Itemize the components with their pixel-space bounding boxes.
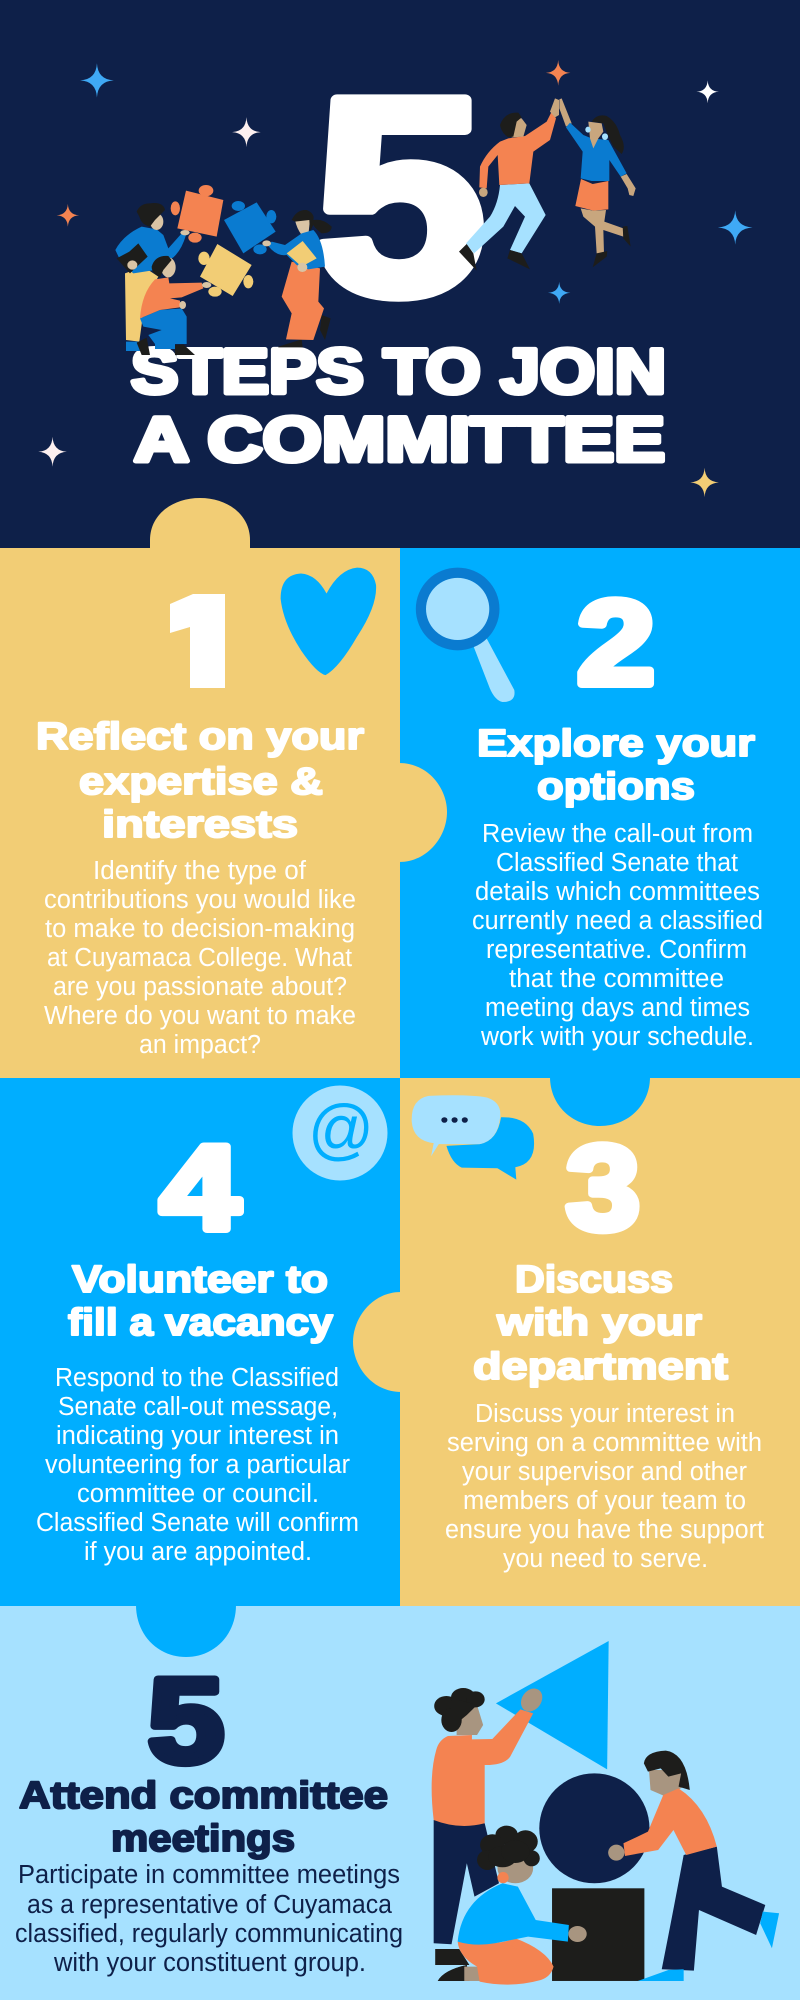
body step 5: as a representative of Cuyamaca	[27, 1891, 393, 1919]
panel: step 5 background	[0, 1606, 800, 2000]
number 3: 3	[566, 1121, 640, 1255]
body step 4: Respond to the Classified	[55, 1364, 339, 1392]
body step 1: Identify the type of	[93, 857, 307, 885]
shape: triangle	[496, 1641, 609, 1769]
body step 5: Participate in committee meetings	[18, 1861, 400, 1889]
body step 5	[15, 1861, 403, 1977]
body step 1: at Cuyamaca College. What	[47, 944, 352, 972]
illustration: team building shapes	[432, 1641, 779, 1985]
heading step 2	[477, 723, 755, 808]
heading step 5: Attend committee	[19, 1775, 388, 1817]
body step 2: meeting days and times	[485, 994, 750, 1022]
body step 1: are you passionate about?	[53, 973, 347, 1001]
icon: magnifying glass	[416, 568, 515, 702]
panel: step 3 background	[400, 1078, 800, 1607]
body step 2: Review the call-out from	[482, 820, 753, 848]
heading step 1: expertise &	[79, 761, 323, 803]
body step 2: representative. Confirm	[486, 936, 747, 964]
heading step 4: fill a vacancy	[68, 1302, 333, 1344]
step 4 content	[36, 1086, 388, 1566]
person: kneeling	[137, 256, 211, 355]
body step 4: indicating your interest in	[56, 1422, 339, 1450]
body step 2: details which committees	[475, 878, 760, 906]
body step 4: Senate call-out message,	[58, 1393, 338, 1421]
person: standing reaching up	[432, 1687, 545, 1981]
heading step 3: department	[473, 1346, 728, 1388]
puzzle tab: step 3 into step 4	[353, 1292, 401, 1392]
title: STEPS TO JOIN	[131, 337, 666, 407]
heading step 5: meetings	[111, 1818, 295, 1860]
body step 1: to make to decision-making	[45, 915, 355, 943]
person: pushing circle	[608, 1751, 779, 1981]
panel: step 1 background	[0, 548, 400, 1078]
person: high five man	[459, 98, 559, 271]
body step 1: contributions you would like	[44, 886, 356, 914]
heading step 1: interests	[102, 804, 298, 846]
heading step 3: Discuss	[515, 1259, 673, 1301]
puzzle piece: blue	[224, 201, 276, 254]
icon: at sign	[292, 1086, 388, 1180]
body step 3: ensure you have the support	[445, 1516, 764, 1544]
heading step 4: Volunteer to	[72, 1259, 328, 1301]
heading step 1	[36, 716, 364, 846]
number 4: 4	[160, 1121, 240, 1255]
title	[131, 337, 666, 475]
body step 3: serving on a committee with	[447, 1429, 762, 1457]
step 5 content	[15, 1641, 779, 1985]
heading step 1: Reflect on your	[36, 716, 364, 758]
body step 2: Classified Senate that	[496, 849, 738, 877]
heading step 3	[473, 1259, 728, 1388]
shape: circle	[539, 1773, 649, 1883]
number 5: 5	[148, 1654, 224, 1788]
heading step 4	[68, 1259, 333, 1344]
body step 3: Discuss your interest in	[475, 1400, 735, 1428]
body step 1	[44, 857, 356, 1059]
stars	[38, 60, 753, 497]
puzzle piece: yellow	[198, 244, 253, 297]
body step 5: classified, regularly communicating	[15, 1920, 403, 1948]
step 1 content	[36, 568, 376, 1059]
body step 4: if you are appointed.	[84, 1538, 312, 1566]
body step 1: Where do you want to make	[44, 1002, 356, 1030]
icon: at sign: @	[308, 1091, 374, 1167]
person: woman with folder	[262, 210, 332, 347]
number 2: 2	[577, 576, 655, 710]
icon: speech bubbles	[412, 1095, 534, 1180]
big number 5: 5	[314, 41, 486, 353]
body step 3: you need to serve.	[503, 1545, 708, 1573]
illustration: team solving puzzle	[115, 185, 332, 355]
body step 2	[472, 820, 763, 1051]
body step 4: committee or council.	[77, 1480, 319, 1508]
body step 3	[445, 1400, 764, 1573]
heading step 5	[19, 1775, 388, 1860]
title: A COMMITTEE	[134, 405, 665, 475]
puzzle tab: top of step 1	[150, 498, 250, 549]
step 3 content	[412, 1095, 764, 1573]
icon: heart	[281, 568, 376, 675]
body step 3: members of your team to	[463, 1487, 746, 1515]
person: standing with folder	[115, 203, 190, 351]
body step 4	[36, 1364, 359, 1566]
illustration: high five	[459, 98, 636, 271]
shape: square	[552, 1888, 644, 1981]
step 2 content	[416, 568, 763, 1051]
puzzle tab: step 1 into step 2	[399, 763, 447, 862]
header background	[0, 0, 800, 548]
body step 2: currently need a classified	[472, 907, 763, 935]
body step 2: that the committee	[509, 965, 724, 993]
puzzle tab: step 2 into step 3	[550, 1077, 650, 1126]
body step 4: Classified Senate will confirm	[36, 1509, 359, 1537]
heading step 2: options	[537, 766, 695, 808]
heading step 3: with your	[496, 1302, 702, 1344]
puzzle piece: orange	[171, 185, 223, 243]
body step 2: work with your schedule.	[480, 1023, 754, 1051]
person: high five woman	[559, 98, 636, 267]
body step 1: an impact?	[139, 1031, 261, 1059]
person: crouching	[438, 1826, 587, 1985]
body step 3: your supervisor and other	[462, 1458, 747, 1486]
panel: step 4 background	[0, 1078, 400, 1607]
number 1: 1	[160, 573, 250, 711]
heading step 2: Explore your	[477, 723, 755, 765]
body step 5: with your constituent group.	[53, 1949, 366, 1977]
puzzle tab: step 4 into step 5	[136, 1605, 236, 1657]
body step 4: volunteering for a particular	[45, 1451, 350, 1479]
panel: step 2 background	[400, 548, 800, 1078]
